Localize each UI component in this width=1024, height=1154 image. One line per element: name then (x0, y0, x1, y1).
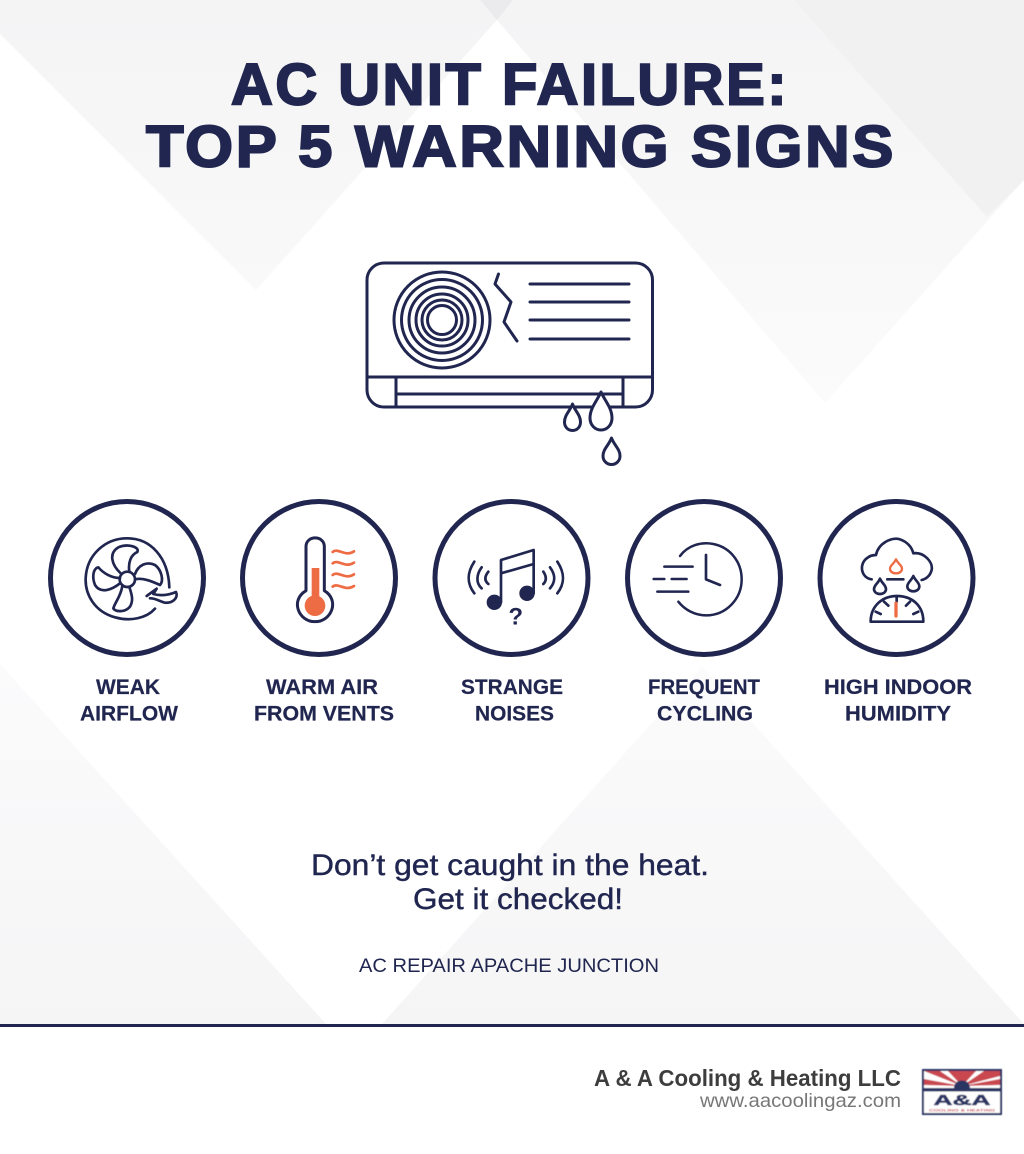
tagline (311, 849, 709, 916)
sign 1: weak airflow (50, 502, 204, 726)
title: AC UNIT FAILURE: (231, 52, 789, 118)
sign 3: strange noises (435, 502, 588, 726)
label (461, 676, 563, 726)
label: WARM AIR (266, 676, 378, 699)
icon ring (820, 502, 973, 654)
website: www.aacoolingaz.com (699, 1090, 901, 1112)
footer band (0, 1024, 1024, 1154)
water drops (564, 392, 620, 464)
icon: thermometer (297, 538, 354, 622)
vent lines (530, 284, 629, 339)
icon: fast clock (654, 543, 742, 615)
label (648, 676, 760, 726)
sign 5: high indoor humidity (820, 502, 973, 726)
location line: AC REPAIR APACHE JUNCTION (359, 955, 659, 977)
company logo: A&A (934, 1092, 991, 1109)
icon: music note (469, 550, 563, 630)
sign 4: frequent cycling (628, 502, 780, 726)
label (254, 676, 394, 726)
icon: music note: ? (508, 603, 523, 630)
label: FROM VENTS (254, 702, 394, 726)
tagline: Don’t get caught in the heat. (311, 849, 709, 882)
lower louvre (367, 377, 653, 407)
icon ring (242, 502, 396, 654)
label: WEAK (96, 676, 160, 699)
label: HIGH INDOOR (824, 676, 972, 699)
label (824, 676, 972, 726)
title (146, 52, 896, 180)
company name: A & A Cooling & Heating LLC (594, 1065, 901, 1091)
icon ring (435, 502, 588, 654)
label: FREQUENT (648, 676, 760, 699)
sign 2: warm air from vents (242, 502, 396, 726)
label: AIRFLOW (80, 702, 178, 726)
label: NOISES (475, 702, 554, 726)
icon ring (50, 502, 204, 654)
label: HUMIDITY (845, 702, 951, 726)
icon: cloud and gauge (862, 539, 932, 622)
icon: leaking AC unit (367, 263, 653, 464)
tagline: Get it checked! (413, 883, 623, 916)
label: STRANGE (461, 676, 563, 699)
title: TOP 5 WARNING SIGNS (146, 114, 896, 180)
label (80, 676, 178, 726)
crack (495, 274, 517, 341)
icon: fan (86, 538, 177, 619)
AC unit body (367, 263, 652, 407)
concentric fan rings (394, 272, 490, 368)
icon ring (628, 502, 780, 654)
label: CYCLING (657, 702, 753, 726)
company logo (923, 1070, 1001, 1114)
company logo: COOLING & HEATING (929, 1108, 995, 1112)
